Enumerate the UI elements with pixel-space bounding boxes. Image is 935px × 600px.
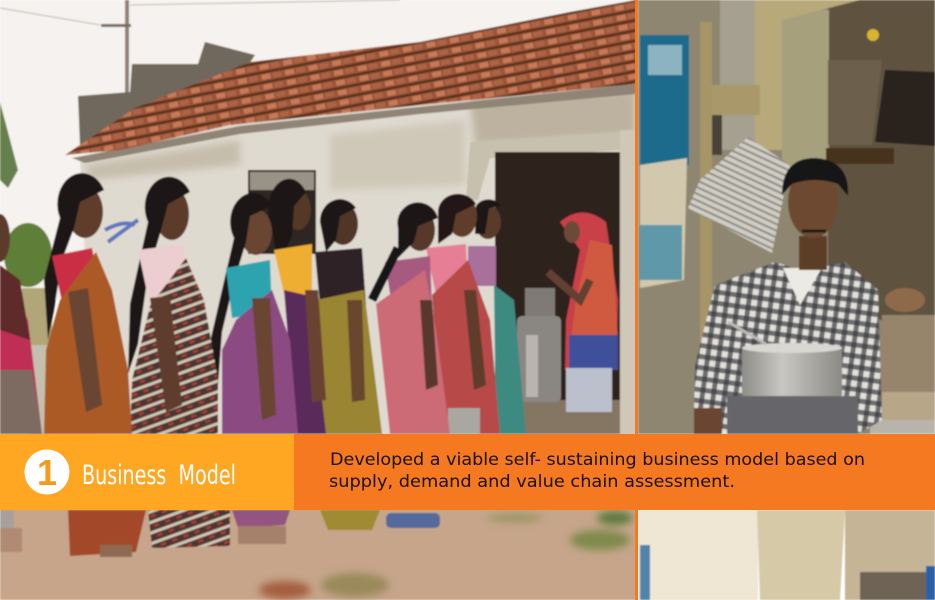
doorway [466, 130, 636, 435]
eave band [72, 84, 636, 163]
woman 5 black blouse olive sari [315, 199, 382, 434]
number badge: 1 [37, 452, 57, 493]
description text: Developed a viable self- sustaining business model based on [330, 450, 865, 470]
inner door jamb [782, 10, 829, 170]
woman pouring milk in doorway [548, 212, 618, 412]
blue poster [640, 35, 689, 165]
door frame [700, 0, 860, 422]
heading text: Business Model [82, 460, 236, 491]
newspaper [688, 137, 790, 253]
ground below banner [0, 505, 636, 600]
lower wall, trousers and counter [638, 510, 935, 600]
description panel [294, 434, 935, 510]
neck and face [782, 158, 848, 270]
t-shirt [783, 268, 822, 305]
man's arm [694, 408, 722, 434]
lower poster [640, 158, 687, 288]
parapet behind roof [78, 42, 255, 145]
lower saris and feet [0, 510, 440, 557]
window [248, 170, 316, 254]
woman 1 red blouse orange sari [44, 173, 132, 434]
hanging ornament [867, 29, 879, 41]
man's shirt [694, 262, 882, 434]
photo: women queuing outside the milk collection centre [0, 0, 636, 440]
woman 7 pink blouse red sari [426, 194, 500, 434]
framed pictures [826, 60, 935, 164]
utility pole and wires [0, 0, 400, 100]
banner [0, 434, 935, 510]
sky [0, 0, 636, 300]
milk can [517, 288, 561, 402]
photo: tea seller with pot [638, 0, 935, 600]
grass and stones [259, 511, 633, 599]
interior back wall [828, 0, 935, 320]
number badge [24, 450, 70, 494]
woman 8 teal sari [468, 199, 526, 434]
woman 3 teal blouse purple sari [210, 193, 298, 434]
wall blue graffiti [105, 220, 138, 242]
woman 4 yellow blouse [268, 179, 326, 434]
wall shading [85, 90, 636, 190]
counter right [870, 288, 935, 434]
woman 2 pink blouse striped sari [128, 177, 218, 434]
description text: supply, demand and value chain assessment. [329, 472, 735, 492]
trees and distant vegetation [0, 102, 52, 435]
description text [329, 450, 865, 492]
stove [727, 396, 858, 434]
cooking pot [728, 322, 842, 398]
grey wall [638, 0, 935, 434]
white house wall [80, 85, 636, 440]
vertical orange divider [635, 0, 638, 600]
tiled roof [65, 0, 636, 155]
heading panel [0, 434, 294, 510]
woman 6 mauve blouse pink sari [372, 202, 450, 434]
woman 0 at left edge [0, 214, 42, 434]
